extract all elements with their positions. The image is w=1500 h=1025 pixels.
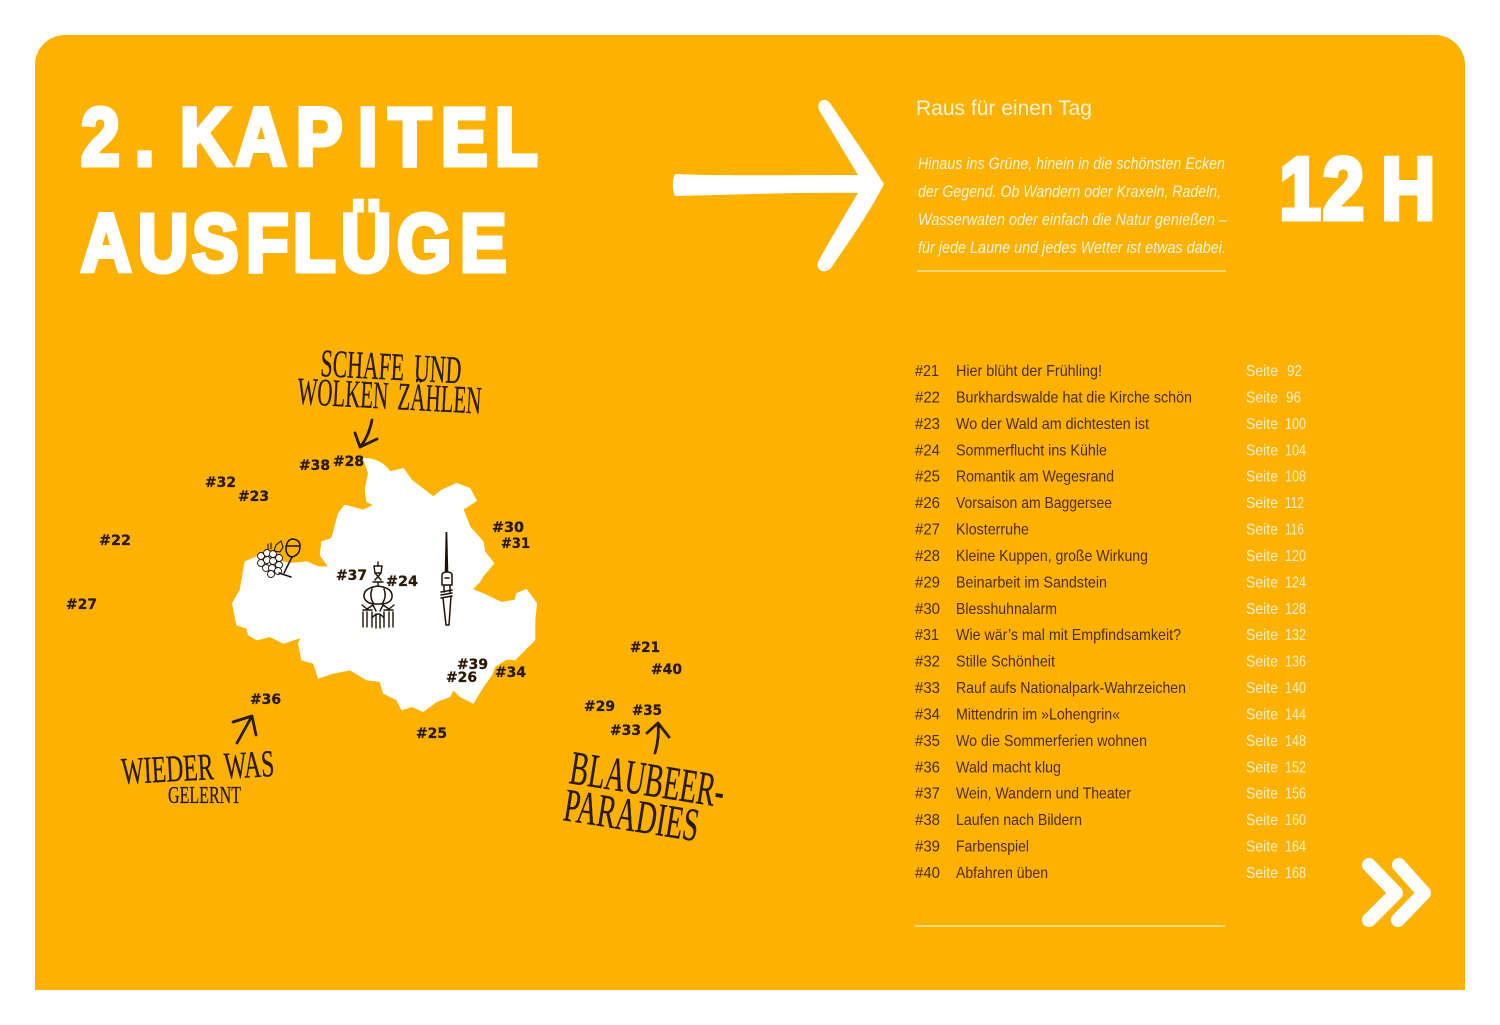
row 27: Klosterruhe <box>956 522 1029 538</box>
row 30: #30 <box>915 601 940 618</box>
row 32: 136 <box>1285 654 1306 671</box>
row 34: #34 <box>915 706 940 724</box>
row 35 <box>915 733 1306 750</box>
map number markers: #32 <box>205 475 236 491</box>
row 34: 144 <box>1285 706 1306 724</box>
callout: Schafe und Wolken zählen: SCHAFE UND <box>320 342 463 392</box>
row 38: #38 <box>915 812 940 829</box>
map number markers: #21 <box>630 640 660 656</box>
row 30 <box>915 601 1306 618</box>
icon: TV tower <box>441 532 452 625</box>
map number markers: #36 <box>250 692 281 708</box>
heading: Raus für einen Tag: Raus für einen Tag <box>916 97 1092 120</box>
row 21: Hier blüht der Frühling! <box>956 363 1102 380</box>
row 29: 124 <box>1285 574 1306 591</box>
row 40: #40 <box>915 865 940 882</box>
row 39: #39 <box>915 839 940 856</box>
row 39: 164 <box>1285 839 1306 856</box>
chapter list <box>915 363 1306 882</box>
arrow: to #33 and #35 <box>647 723 669 753</box>
row 30: Seite <box>1246 601 1278 618</box>
duration: 12H: 12H <box>1279 140 1435 238</box>
row 34: Seite <box>1246 706 1278 724</box>
callout: Wieder was gelernt <box>120 743 275 809</box>
row 27: Seite <box>1246 522 1278 538</box>
row 26: 112 <box>1285 495 1304 512</box>
callout: Blaubeer-Paradies <box>560 742 729 852</box>
row 31: 132 <box>1285 627 1306 644</box>
map number markers: #23 <box>238 489 269 505</box>
row 26: Seite <box>1246 495 1278 512</box>
row 24: Sommerflucht ins Kühle <box>956 442 1107 459</box>
row 38: Laufen nach Bildern <box>956 812 1082 829</box>
row 24 <box>915 442 1306 459</box>
title: 2. Kapitel Ausflüge <box>81 92 538 289</box>
map number markers: #27 <box>66 597 97 613</box>
row 23: Seite <box>1246 416 1278 433</box>
row 39 <box>915 839 1306 856</box>
map number markers: #26 <box>446 670 477 686</box>
row 31: Seite <box>1246 627 1278 644</box>
row 29: Beinarbeit im Sandstein <box>956 574 1107 591</box>
row 38: 160 <box>1285 812 1306 829</box>
row 32: #32 <box>915 654 940 671</box>
map number markers: #34 <box>495 665 526 681</box>
map number markers: #22 <box>99 533 131 549</box>
map number markers: #33 <box>610 723 641 739</box>
row 36 <box>915 759 1306 776</box>
row 23: #23 <box>915 416 940 433</box>
row 25: 108 <box>1285 469 1306 486</box>
map of Dresden region <box>232 458 537 712</box>
callout: Schafe und Wolken zählen <box>297 342 483 423</box>
row 27 <box>915 522 1304 538</box>
row 25: Romantik am Wegesrand <box>956 469 1114 486</box>
callout: Blaubeer-Paradies: PARADIES <box>560 780 703 852</box>
map number markers: #30 <box>492 520 524 536</box>
row 36: #36 <box>915 759 940 776</box>
row 24: Seite <box>1246 442 1278 459</box>
intro paragraph: der Gegend. Ob Wandern oder Kraxeln, Radeln, <box>918 182 1221 201</box>
map number markers: #31 <box>501 536 530 552</box>
callout: Schafe und Wolken zählen: WOLKEN ZÄHLEN <box>297 370 483 423</box>
row 22: #22 <box>915 389 940 406</box>
icon: wine glass and grapes <box>258 539 300 578</box>
intro paragraph: für jede Laune und jedes Wetter ist etwas dabei. <box>918 238 1226 257</box>
icon: double chevron next <box>1369 865 1424 920</box>
row 40: Abfahren üben <box>956 865 1048 882</box>
row 23 <box>915 416 1306 433</box>
map number markers: #28 <box>333 454 364 470</box>
row 26: Vorsaison am Baggersee <box>956 495 1112 512</box>
title: 2. Kapitel Ausflüge: 2. KAPITEL <box>81 92 538 183</box>
row 26 <box>915 495 1304 512</box>
row 27: 116 <box>1285 522 1304 538</box>
row 35: #35 <box>915 733 940 750</box>
row 25: Seite <box>1246 469 1278 486</box>
row 33: Rauf aufs Nationalpark-Wahrzeichen <box>956 680 1186 697</box>
row 40: Seite <box>1246 865 1278 882</box>
map number markers: #29 <box>584 699 615 715</box>
row 37: Seite <box>1246 786 1278 803</box>
row 37: Wein, Wandern und Theater <box>956 786 1132 803</box>
row 24: 104 <box>1285 442 1306 459</box>
row 28: Seite <box>1246 548 1278 565</box>
row 31 <box>915 627 1306 644</box>
map number markers: #40 <box>651 662 682 678</box>
icon: Zwinger crown gate <box>362 562 394 628</box>
row 33: #33 <box>915 680 940 697</box>
row 35: Wo die Sommerferien wohnen <box>956 733 1147 750</box>
row 21: Seite <box>1246 363 1278 380</box>
row 21 <box>915 363 1302 380</box>
row 39: Seite <box>1246 839 1278 856</box>
row 31: Wie wär’s mal mit Empfindsamkeit? <box>956 627 1181 644</box>
row 25: #25 <box>915 469 940 486</box>
row 23: 100 <box>1285 416 1306 433</box>
row 34: Mittendrin im »Lohengrin« <box>956 706 1120 724</box>
row 29: #29 <box>915 574 940 591</box>
map number markers: #25 <box>416 726 447 742</box>
row 28: #28 <box>915 548 940 565</box>
row 34 <box>915 706 1306 724</box>
row 38 <box>915 812 1306 829</box>
arrow: large white right arrow <box>673 100 884 271</box>
row 30: Blesshuhnalarm <box>956 601 1057 618</box>
row 26: #26 <box>915 495 940 512</box>
row 40 <box>915 865 1306 882</box>
row 32: Stille Schönheit <box>956 654 1055 671</box>
callout: Wieder was gelernt: GELERNT <box>168 783 241 809</box>
row 37: #37 <box>915 786 940 803</box>
intro paragraph: Hinaus ins Grüne, hinein in die schönsten Ecken <box>918 154 1225 173</box>
map number markers: #39 <box>457 657 488 673</box>
row 29 <box>915 574 1306 591</box>
row 22 <box>915 389 1301 406</box>
intro paragraph: Wasserwaten oder einfach die Natur genießen – <box>918 210 1227 229</box>
row 23: Wo der Wald am dichtesten ist <box>956 416 1149 433</box>
callout: Wieder was gelernt: WIEDER WAS <box>120 743 275 793</box>
intro paragraph <box>918 154 1227 257</box>
row 38: Seite <box>1246 812 1278 829</box>
callout: Blaubeer-Paradies: BLAUBEER- <box>566 742 729 818</box>
row 37: 156 <box>1285 786 1306 803</box>
row 21: 92 <box>1287 363 1302 380</box>
arrow: to #36 <box>233 716 256 743</box>
row 35: Seite <box>1246 733 1278 750</box>
row 28 <box>915 548 1306 565</box>
row 36: Seite <box>1246 759 1278 776</box>
row 40: 168 <box>1285 865 1306 882</box>
map number markers: #35 <box>632 703 662 719</box>
row 36: 152 <box>1285 759 1306 776</box>
row 21: #21 <box>915 363 939 380</box>
title: 2. Kapitel Ausflüge: AUSFLÜGE <box>81 198 507 289</box>
row 33: 140 <box>1285 680 1306 697</box>
row 22: 96 <box>1286 389 1301 406</box>
row 29: Seite <box>1246 574 1278 591</box>
row 37 <box>915 786 1306 803</box>
row 35: 148 <box>1285 733 1306 750</box>
row 24: #24 <box>915 442 940 459</box>
row 28: 120 <box>1285 548 1306 565</box>
row 22: Burkhardswalde hat die Kirche schön <box>956 389 1192 406</box>
arrow: to #28 <box>355 420 377 447</box>
row 30: 128 <box>1285 601 1306 618</box>
row 25 <box>915 469 1306 486</box>
map number markers <box>66 454 682 742</box>
row 28: Kleine Kuppen, große Wirkung <box>956 548 1148 565</box>
row 31: #31 <box>915 627 939 644</box>
row 33 <box>915 680 1306 697</box>
row 32: Seite <box>1246 654 1278 671</box>
row 22: Seite <box>1246 389 1278 406</box>
row 27: #27 <box>915 522 940 538</box>
map number markers: #24 <box>386 574 418 590</box>
map number markers: #38 <box>299 458 330 474</box>
row 33: Seite <box>1246 680 1278 697</box>
row 36: Wald macht klug <box>956 759 1061 776</box>
row 39: Farbenspiel <box>956 839 1029 856</box>
map number markers: #37 <box>336 568 367 584</box>
row 32 <box>915 654 1306 671</box>
